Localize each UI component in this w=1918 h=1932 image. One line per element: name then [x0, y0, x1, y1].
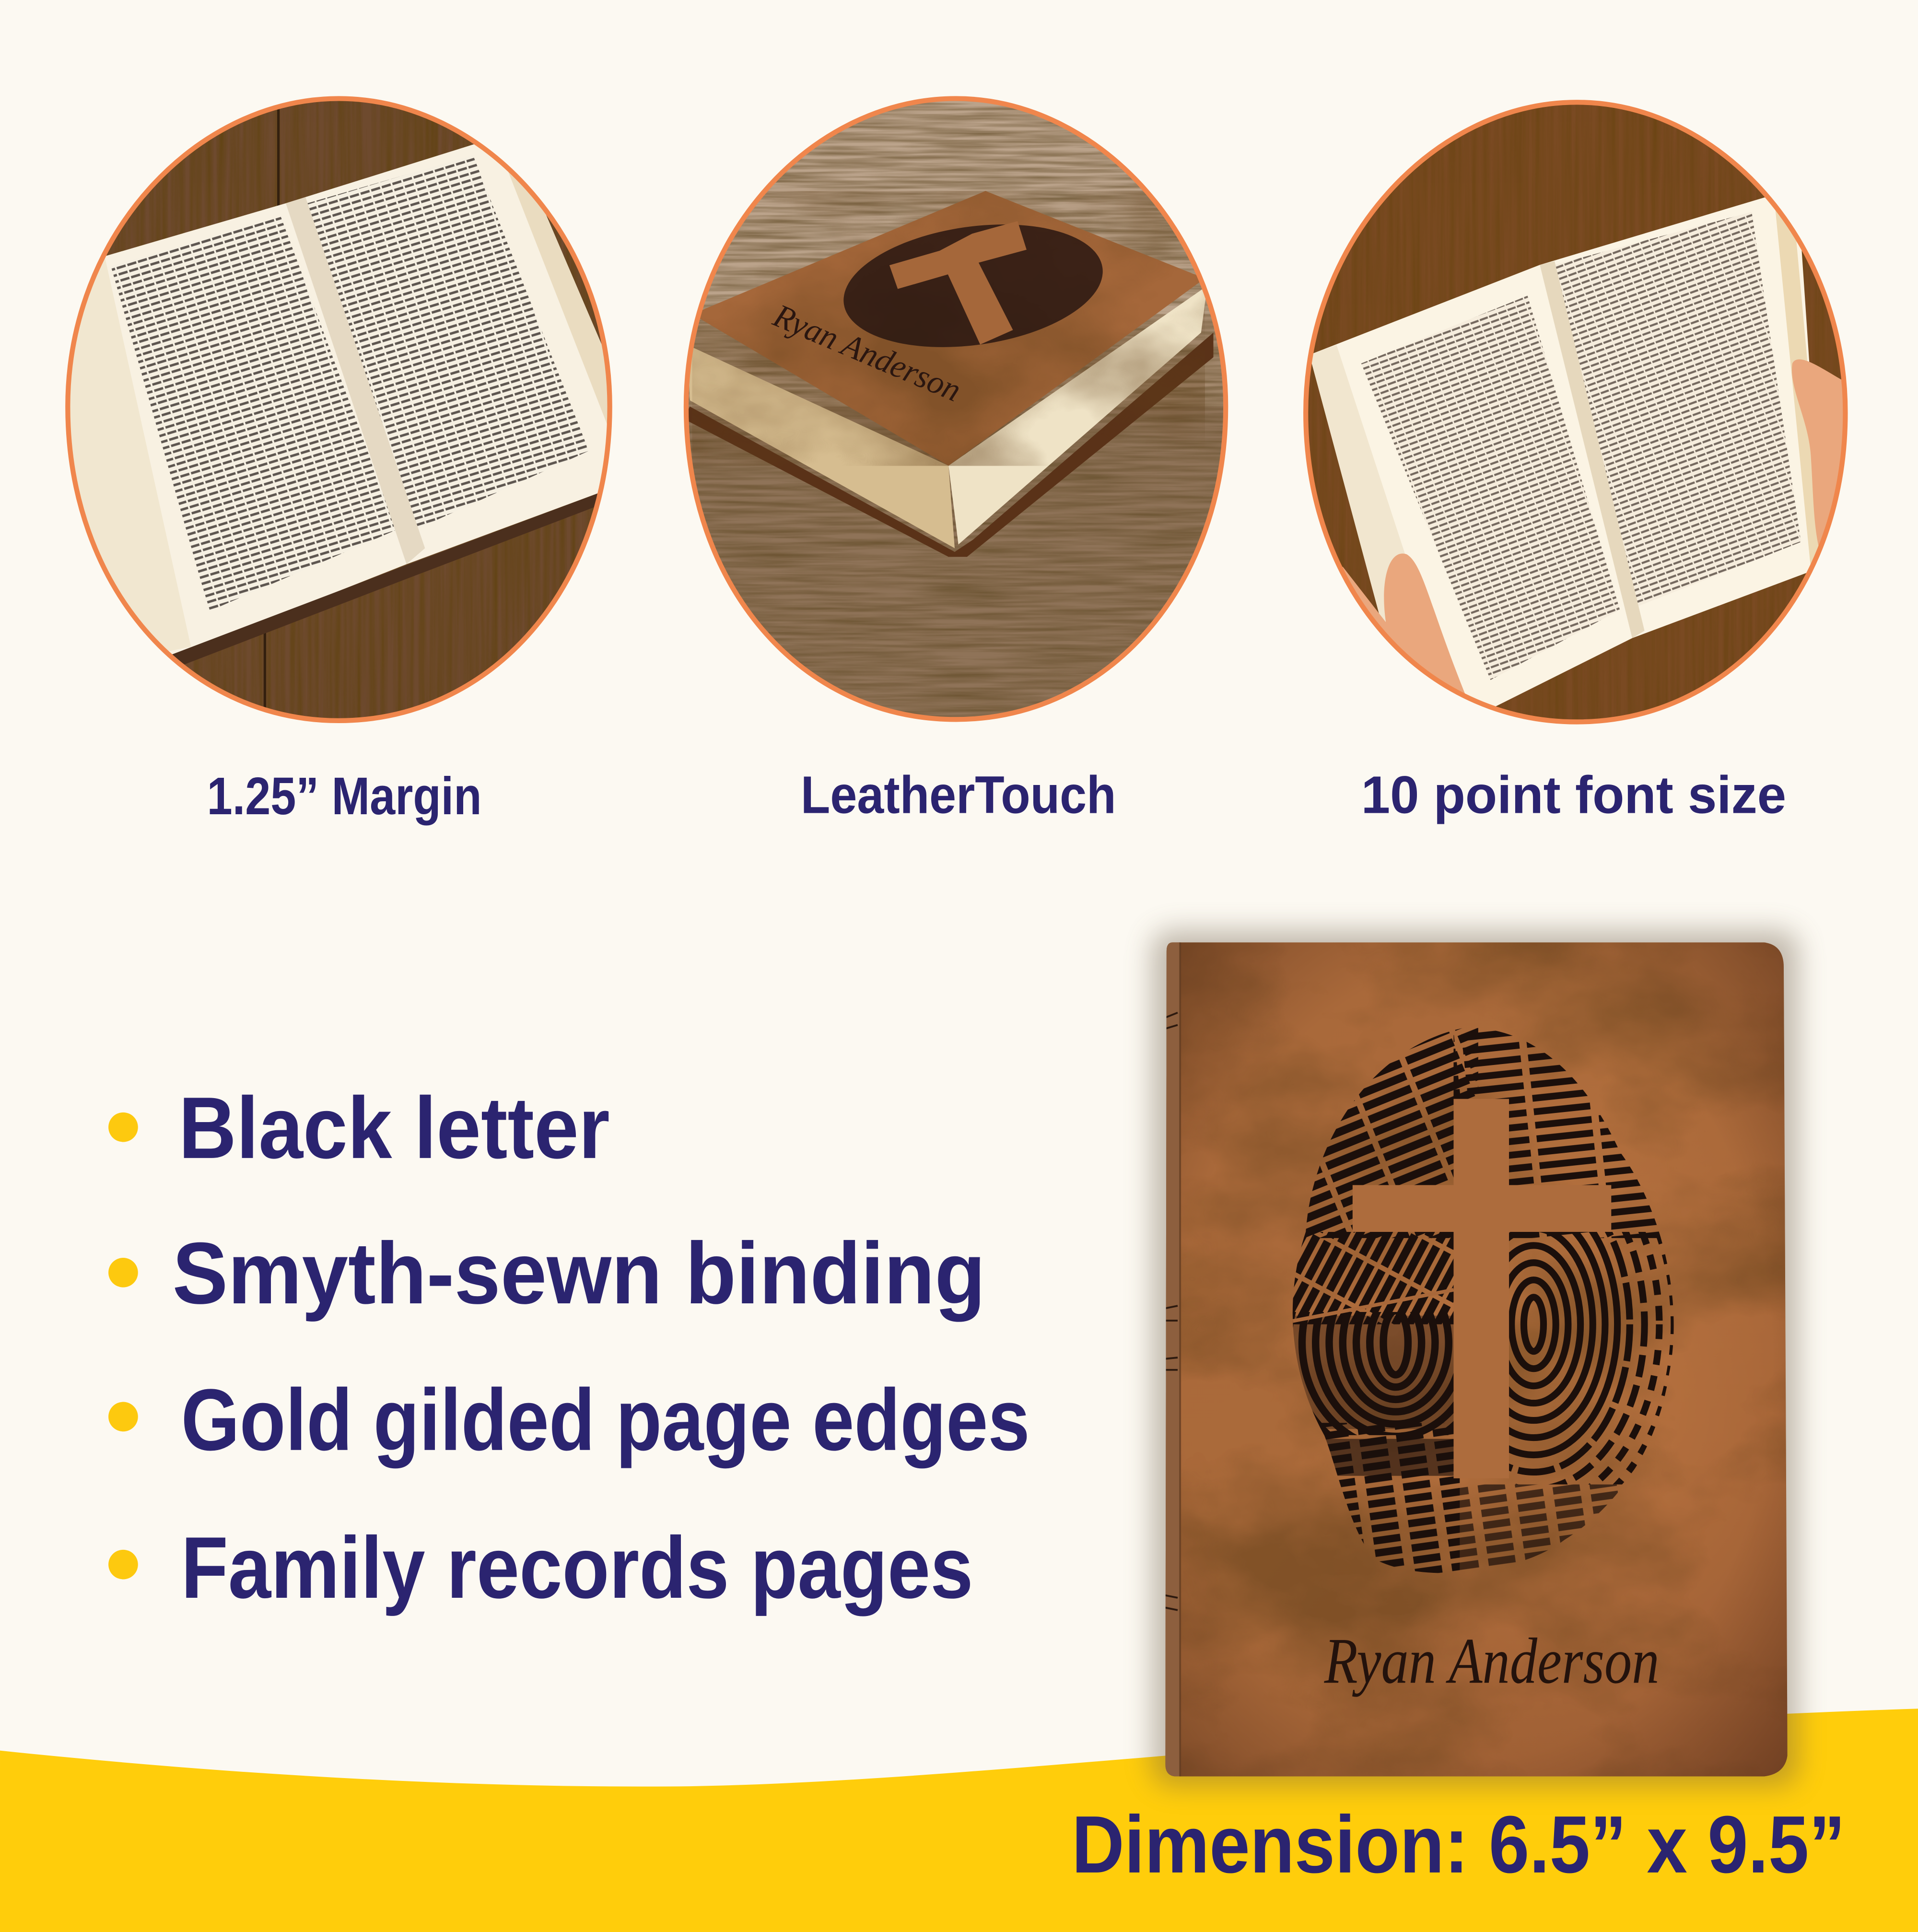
engraved name on small cover: Ryan Anderson [768, 297, 966, 409]
dimension label: Dimension: 6.5” x 9.5” [1072, 1799, 1845, 1890]
caption: margin: 1.25” Margin [207, 767, 482, 826]
feature: binding: Smyth-sewn binding [173, 1224, 985, 1322]
photo: LeatherTouch cover corner [678, 93, 1232, 727]
bullet: binding [108, 1258, 138, 1288]
book cover photo [1152, 930, 1799, 1786]
spine marks [1165, 1013, 1178, 1610]
hand right [1792, 359, 1860, 554]
yellow wave footer band [0, 1709, 1918, 1932]
feature: edges: Gold gilded page edges [181, 1371, 1030, 1469]
feature list [108, 1079, 1030, 1616]
caption: leather: LeatherTouch [801, 766, 1116, 825]
photo: open book with wide margins [49, 93, 628, 727]
bullet: family [108, 1550, 138, 1579]
hand lower left [1318, 553, 1466, 727]
bullet: edges [108, 1402, 138, 1431]
engraved name: Ryan Anderson [1324, 1625, 1659, 1697]
fingerprint emblem [1281, 1022, 1688, 1577]
feature: family: Family records pages [181, 1519, 973, 1616]
caption: font size: 10 point font size [1361, 766, 1786, 825]
feature: black letter: Black letter [179, 1079, 610, 1177]
photo: hands holding open book [1299, 96, 1860, 730]
bullet: black letter [108, 1112, 138, 1142]
cross cut out of fingerprint [1353, 1099, 1611, 1478]
small fingerprint cross emblem [843, 222, 1103, 347]
